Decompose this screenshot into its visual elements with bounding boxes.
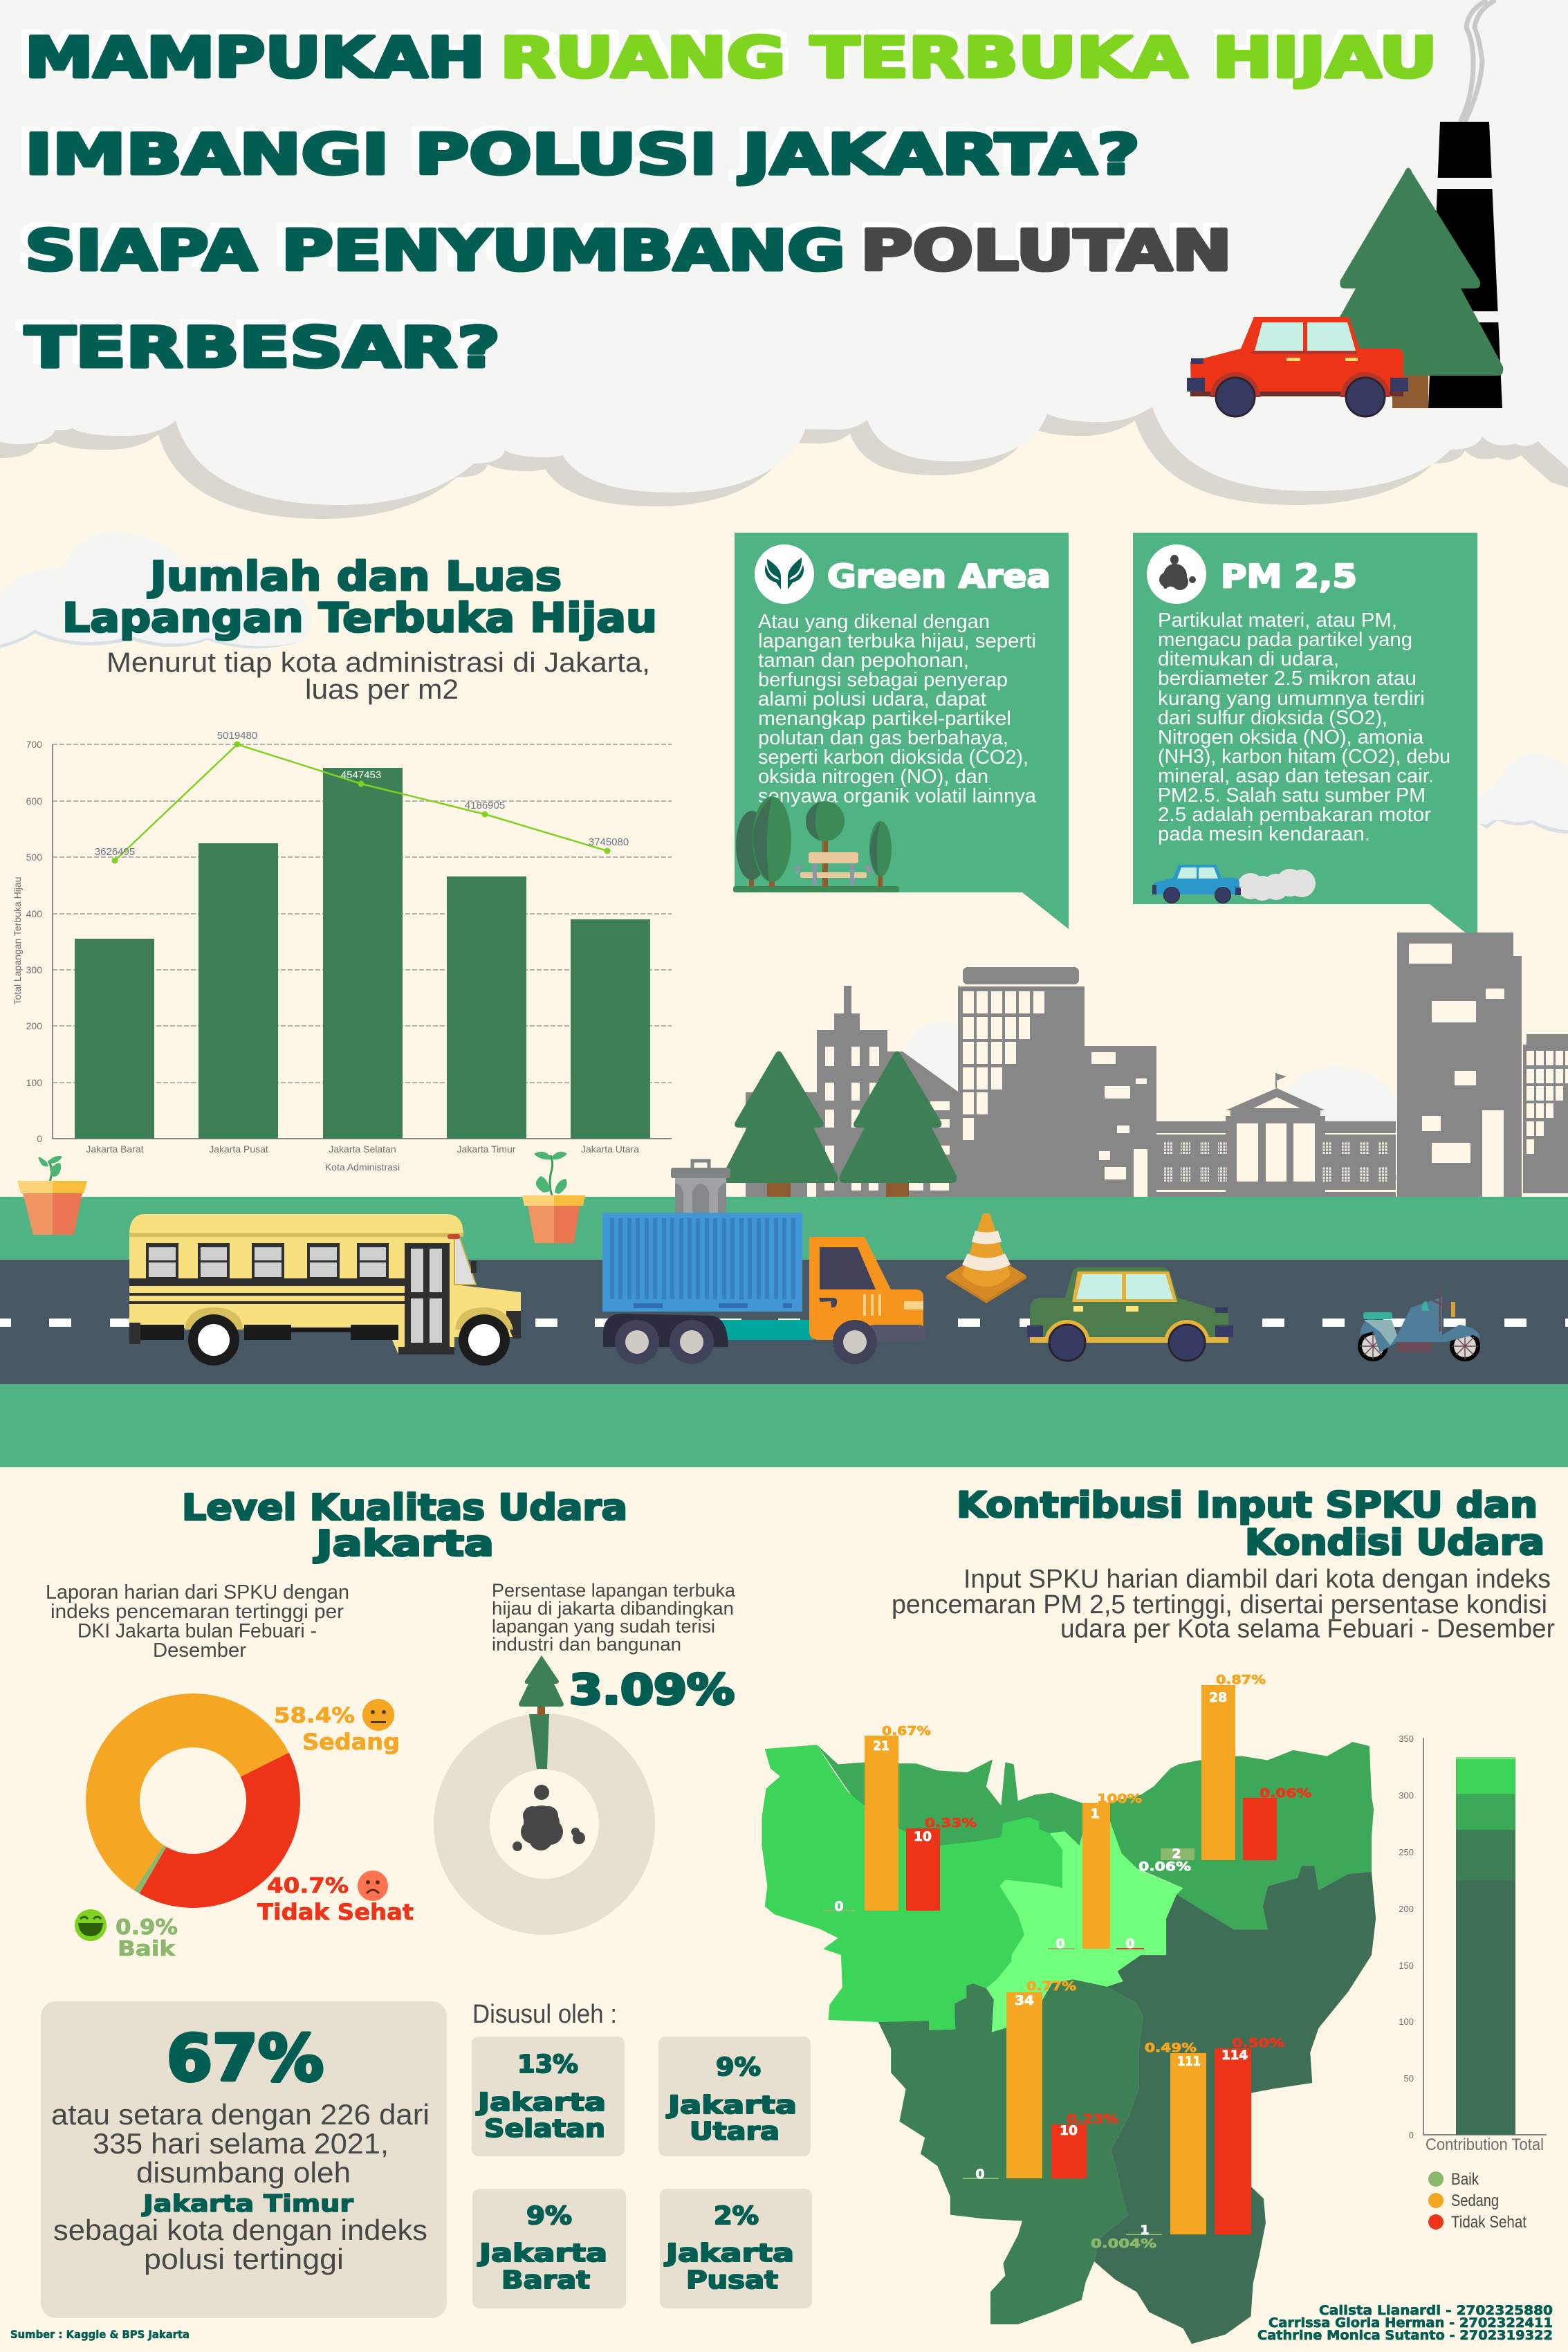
map of jakarta — [762, 1742, 1376, 2344]
green area heading: Green Area — [827, 558, 1051, 595]
stacked contribution chart: 200 — [1399, 1904, 1414, 1914]
summary text: polusi tertinggi — [144, 2243, 344, 2275]
pm text: Nitrogen oksida (NO), amonia — [1158, 726, 1424, 748]
panel: 67% summary — [41, 2001, 447, 2318]
summary text: Jakarta Timur — [142, 2190, 353, 2218]
green area text: oksida nitrogen (NO), dan — [758, 766, 988, 788]
subheading: luas per m2 — [305, 674, 459, 705]
region: jakarta selatan — [878, 1979, 1143, 2324]
label: baik: Baik — [118, 1937, 176, 1961]
spku description: Input SPKU harian diambil dari kota dengan indeks — [963, 1565, 1551, 1594]
left building — [746, 986, 958, 1197]
stacked contribution chart: 100 — [1399, 2016, 1414, 2027]
heading: level kualitas udara — [182, 1487, 627, 1565]
bars: jakarta barat — [823, 1724, 977, 1914]
panel: jakarta barat: Barat — [501, 2266, 590, 2295]
stacked contribution chart: 350 — [1399, 1734, 1414, 1744]
bar and line chart: Total Lapangan Terbuka Hijau — [12, 877, 23, 1004]
panel: pm 2,5 — [1133, 533, 1477, 942]
legend — [1428, 2170, 1527, 2232]
bars: jakarta utara: 0.06% — [1138, 1859, 1191, 1874]
donut chart: green space share — [434, 1714, 655, 1935]
header cloud — [0, 0, 1568, 505]
panel: jakarta barat: Jakarta — [477, 2239, 607, 2268]
title — [17, 21, 1437, 380]
summary text — [51, 2098, 430, 2275]
panel: jakarta pusat: Jakarta — [663, 2239, 794, 2268]
label: sedang: 58.4% — [274, 1704, 355, 1728]
right tower — [1397, 932, 1522, 1197]
government building — [1156, 1073, 1396, 1197]
far right tower — [1523, 1034, 1568, 1193]
title: MAMPUKAH — [25, 26, 485, 90]
bars: jakarta selatan: 0.77% — [1026, 1979, 1076, 1994]
heading: kontribusi input spku: Kondisi Udara — [1245, 1523, 1544, 1563]
summary text: disumbang oleh — [136, 2156, 351, 2189]
panel: jakarta utara: Jakarta — [665, 2091, 797, 2120]
stacked contribution chart: 50 — [1404, 2073, 1414, 2084]
label: sedang — [274, 1699, 400, 1755]
pine tree — [1312, 167, 1503, 408]
header cloud shadow — [0, 0, 1568, 519]
bars: jakarta utara — [1138, 1673, 1311, 1874]
bars: jakarta pusat: 100% — [1097, 1792, 1142, 1806]
bars: jakarta pusat: 1 — [1090, 1806, 1100, 1821]
region: jakarta barat — [762, 1745, 1062, 2030]
title: TERBESAR? — [25, 315, 500, 380]
bar and line chart: Jakarta Pusat — [209, 1143, 268, 1155]
legend: Baik — [1451, 2170, 1479, 2189]
potted plant left — [17, 1156, 87, 1235]
panel: jakarta pusat — [660, 2189, 812, 2308]
summary text: atau setara dengan 226 dari — [51, 2098, 430, 2131]
subheading: Menurut tiap kota administrasi di Jakarta, — [107, 647, 650, 678]
region: jakarta utara — [817, 1742, 1374, 1929]
bars: jakarta pusat — [1048, 1792, 1144, 1951]
background clouds — [0, 532, 1568, 1190]
bars: jakarta pusat: 0 — [1125, 1936, 1135, 1951]
heading: level kualitas udara: Jakarta — [313, 1523, 494, 1565]
panel: jakarta selatan — [472, 2037, 625, 2156]
bars: jakarta timur — [1091, 2036, 1284, 2251]
stacked contribution chart: 150 — [1399, 1960, 1414, 1971]
bar and line chart — [12, 730, 672, 1173]
panel: jakarta pusat: Pusat — [686, 2266, 778, 2295]
title: POLUTAN — [860, 219, 1232, 283]
bars: jakarta selatan: 34 — [1015, 1993, 1034, 2008]
bars: jakarta pusat: 0 — [1055, 1936, 1065, 1951]
pm text: PM2.5. Salah satu sumber PM — [1158, 784, 1426, 807]
title: SIAPA PENYUMBANG POLUTAN — [17, 214, 1224, 278]
panel: jakarta utara: 9% — [716, 2053, 761, 2082]
title: MAMPUKAH RUANG TERBUKA HIJAU — [17, 21, 1430, 85]
pm text: ditemukan di udara, — [1158, 648, 1339, 670]
title: IMBANGI POLUSI JAKARTA? — [25, 122, 1140, 187]
bars: jakarta timur: 114 — [1221, 2048, 1248, 2063]
green area text: berfungsi sebagai penyerap — [758, 669, 1008, 691]
bars: jakarta barat: 0.33% — [925, 1816, 977, 1830]
bars: jakarta barat: 10 — [914, 1829, 932, 1844]
bars: jakarta timur: 0.49% — [1145, 2041, 1197, 2055]
pm text: mineral, asap dan tetesan cair. — [1158, 765, 1434, 787]
bar and line chart: 600 — [26, 796, 42, 807]
label: tidak sehat: Tidak Sehat — [257, 1899, 414, 1925]
office block — [1085, 1046, 1156, 1197]
label: tidak sehat: 40.7% — [267, 1874, 349, 1898]
green area text: alami polusi udara, dapat — [758, 688, 986, 710]
panel: jakarta pusat: 2% — [714, 2202, 759, 2230]
bars: jakarta timur: 0.004% — [1091, 2236, 1156, 2251]
green area text: polutan dan gas berbahaya, — [758, 727, 1008, 749]
panel: jakarta selatan: Jakarta — [475, 2088, 606, 2117]
bars: jakarta barat: 21 — [873, 1738, 889, 1754]
bars: jakarta barat: 0 — [834, 1899, 844, 1914]
spku description — [892, 1565, 1555, 1644]
bar and line chart: 500 — [26, 852, 42, 863]
bar and line chart: 3745080 — [589, 836, 629, 848]
bars: jakarta utara: 2 — [1172, 1846, 1181, 1862]
summary text: 335 hari selama 2021, — [93, 2127, 389, 2160]
bar and line chart: 3626495 — [95, 846, 135, 858]
heading: kontribusi input spku: Kontribusi Input SPKU dan — [957, 1485, 1538, 1526]
stat: 3.09%: 3.09% — [569, 1666, 735, 1714]
legend: Sedang — [1451, 2192, 1499, 2210]
potted plant right — [522, 1152, 585, 1243]
bar and line chart: 700 — [26, 739, 42, 750]
title: SIAPA PENYUMBANG — [25, 219, 845, 283]
bars: jakarta barat: 0.67% — [882, 1724, 931, 1738]
green car — [1027, 1267, 1233, 1361]
bars: jakarta timur: 111 — [1177, 2054, 1201, 2069]
panel: jakarta barat — [472, 2189, 626, 2308]
pm text: mengacu pada partikel yang — [1158, 629, 1412, 651]
bar and line chart: Jakarta Timur — [457, 1143, 516, 1155]
park illustration — [733, 796, 899, 892]
bars: jakarta timur: 0.50% — [1232, 2036, 1284, 2050]
bar and line chart: Kota Administrasi — [325, 1161, 400, 1173]
pine tree small — [519, 1655, 564, 1716]
bars: jakarta selatan — [963, 1979, 1118, 2182]
skyline pine trees — [722, 1051, 957, 1198]
bar and line chart: 4547453 — [341, 769, 381, 781]
bars: jakarta utara: 0.06% — [1260, 1786, 1311, 1801]
title: TERBESAR? — [17, 311, 492, 375]
label: sedang: Sedang — [302, 1729, 400, 1755]
bar and line chart: 100 — [26, 1077, 42, 1088]
stacked contribution chart: Contribution Total — [1426, 2135, 1544, 2154]
green space description: hijau di jakarta dibandingkan — [492, 1598, 734, 1619]
credits — [1257, 2303, 1553, 2343]
panel: jakarta utara: Utara — [690, 2117, 780, 2146]
red car — [1187, 317, 1408, 416]
pm text — [1158, 609, 1450, 845]
bar and line chart: Jakarta Barat — [86, 1143, 144, 1155]
pm text: 2.5 adalah pembakaran motor — [1158, 804, 1431, 826]
motorcycle — [1360, 1290, 1480, 1359]
panel: jakarta selatan: 13% — [517, 2050, 578, 2079]
glass tower — [958, 967, 1085, 1197]
title: RUANG TERBUKA HIJAU — [500, 26, 1437, 90]
green area text: taman dan pepohonan, — [758, 650, 969, 672]
legend: Tidak Sehat — [1451, 2213, 1527, 2232]
bar and line chart: 300 — [26, 964, 42, 975]
stacked contribution chart — [1399, 1734, 1547, 2154]
bars: jakarta selatan: 10 — [1060, 2123, 1078, 2138]
air quality description — [46, 1581, 349, 1662]
bar and line chart: 200 — [26, 1020, 42, 1031]
panel: jakarta selatan: Selatan — [484, 2115, 605, 2143]
heading: jumlah dan luas: Jumlah dan Luas — [147, 553, 562, 600]
green area text: seperti karbon dioksida (CO2), — [758, 746, 1029, 769]
stacked contribution chart: 250 — [1399, 1847, 1414, 1857]
container truck — [602, 1213, 927, 1364]
pm text: Partikulat materi, atau PM, — [1158, 609, 1397, 632]
city skyline — [746, 932, 1568, 1197]
traffic cone — [946, 1213, 1026, 1303]
source note: Sumber : Kaggle & BPS Jakarta — [10, 2328, 190, 2341]
green space description: lapangan yang sudah terisi — [492, 1616, 715, 1637]
pm text: (NH3), karbon hitam (CO2), debu — [1158, 746, 1450, 768]
region: jakarta pusat — [985, 1821, 1183, 2032]
air quality description: indeks pencemaran tertinggi per — [50, 1601, 344, 1623]
bars: jakarta selatan: 0.23% — [1067, 2112, 1118, 2126]
green area text: lapangan terbuka hijau, seperti — [758, 630, 1036, 652]
bar and line chart: 4186905 — [465, 800, 505, 811]
icon: soot — [1147, 544, 1206, 604]
spku description: udara per Kota selama Febuari - Desember — [1060, 1615, 1555, 1644]
green space description: industri dan bangunan — [492, 1634, 681, 1655]
label: tidak sehat — [257, 1871, 414, 1925]
road scene — [0, 1197, 1568, 1467]
credits: Calista Lianardi - 2702325880 — [1319, 2303, 1553, 2318]
green area text: senyawa organik volatil lainnya — [758, 785, 1037, 807]
bar and line chart: Jakarta Selatan — [329, 1143, 396, 1155]
green area text: Atau yang dikenal dengan — [758, 611, 990, 633]
icon: soot — [513, 1785, 585, 1851]
chimney with smoke — [1428, 0, 1502, 408]
heading: jumlah dan luas — [62, 553, 657, 641]
panel: green area — [733, 533, 1069, 929]
green space description — [492, 1580, 736, 1655]
spku description: pencemaran PM 2,5 tertinggi, disertai persentase kondisi — [892, 1590, 1547, 1619]
blue car with exhaust — [1152, 865, 1316, 903]
credits: Carrissa Gloria Herman - 2702322411 — [1269, 2315, 1553, 2331]
pm text: kurang yang umumnya terdiri — [1158, 688, 1425, 710]
bars: jakarta utara: 28 — [1209, 1690, 1227, 1705]
region: jakarta timur — [1094, 1866, 1376, 2344]
pm heading: PM 2,5 — [1221, 558, 1357, 595]
big number: 67% — [167, 2021, 324, 2095]
donut chart: air quality — [86, 1693, 300, 1908]
trash bin — [671, 1161, 730, 1216]
credits: Cathrine Monica Sutanto - 2702319322 — [1257, 2328, 1553, 2343]
title: IMBANGI POLUSI JAKARTA? — [17, 118, 1132, 182]
school bus — [129, 1214, 521, 1366]
green space description: Persentase lapangan terbuka — [492, 1580, 736, 1601]
panel: jakarta utara — [658, 2037, 811, 2156]
stacked contribution chart: 300 — [1399, 1790, 1414, 1801]
stacked contribution chart: 0 — [1409, 2130, 1414, 2140]
green area text — [758, 611, 1037, 807]
bars: jakarta utara: 0.87% — [1216, 1673, 1266, 1687]
pm text: berdiameter 2.5 mikron atau — [1158, 668, 1417, 690]
panel: jakarta barat: 9% — [526, 2202, 572, 2230]
disusul oleh: Disusul oleh : — [472, 2000, 617, 2029]
bars: jakarta selatan: 0 — [975, 2167, 985, 2182]
air quality description: DKI Jakarta bulan Febuari - — [77, 1620, 317, 1642]
heading: level kualitas udara: Level Kualitas Udara — [182, 1487, 627, 1529]
bar and line chart: 0 — [37, 1133, 42, 1144]
bar and line chart: 400 — [26, 908, 42, 919]
bar and line chart: Jakarta Utara — [581, 1143, 639, 1155]
bars: jakarta timur: 1 — [1140, 2223, 1150, 2238]
heading: jumlah dan luas: Lapangan Terbuka Hijau — [62, 594, 657, 641]
air quality description: Desember — [153, 1639, 246, 1662]
green area text: menangkap partikel-partikel — [758, 708, 1011, 730]
pm text: pada mesin kendaraan. — [1158, 823, 1370, 845]
pm text: dari sulfur dioksida (SO2), — [1158, 707, 1387, 729]
summary text: sebagai kota dengan indeks — [53, 2214, 427, 2246]
air quality description: Laporan harian dari SPKU dengan — [46, 1581, 349, 1604]
icon: leaf — [755, 544, 814, 604]
label: baik — [75, 1909, 178, 1961]
subheading — [107, 647, 650, 705]
bar and line chart: 5019480 — [217, 730, 257, 742]
heading: kontribusi input spku — [957, 1485, 1544, 1563]
label: baik: 0.9% — [116, 1915, 178, 1940]
